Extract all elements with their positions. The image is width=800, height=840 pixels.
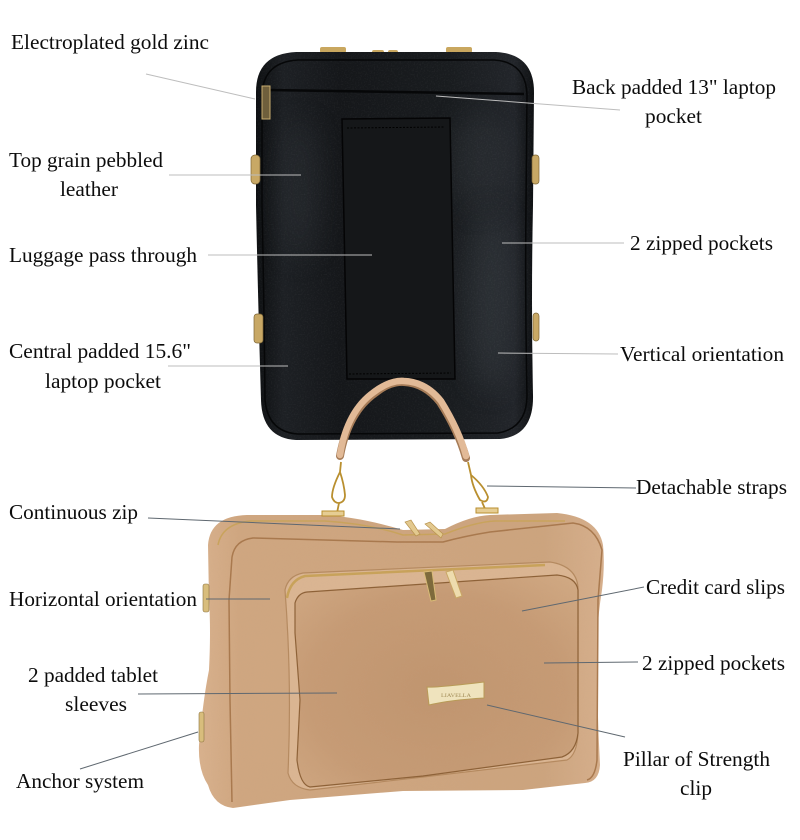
- label: Central padded laptop pocket: laptop pocket: [45, 369, 161, 393]
- label: Top grain pebbled leather: leather: [60, 177, 118, 201]
- label: Top grain pebbled leather: Top grain pebbled: [9, 148, 163, 172]
- label: Anchor system: Anchor system: [16, 769, 144, 793]
- outer zip seam: [262, 60, 527, 434]
- front pocket: [285, 562, 578, 790]
- left snap hook: [322, 462, 345, 516]
- right snap hook: [468, 462, 498, 513]
- detachable strap: [322, 381, 498, 516]
- pocket zip pulls: [424, 570, 462, 601]
- label: Horizontal orientation: Horizontal orientation: [9, 587, 198, 611]
- label: 2 padded tablet sleeves: 2 padded tablet: [28, 663, 158, 687]
- label: Electroplated gold zinc: Electroplated gold zinc: [11, 30, 209, 54]
- gold top hardware: [320, 47, 472, 54]
- label: Back padded 13 inch laptop pocket: [572, 75, 776, 128]
- continuous zip: [218, 521, 565, 545]
- label: 2 padded tablet sleeves: [28, 663, 158, 716]
- label: Continuous zip: Continuous zip: [9, 500, 138, 524]
- label: Back padded 13 inch laptop pocket: pocket: [645, 104, 702, 128]
- logo tab: [262, 86, 270, 119]
- front pocket panel: [295, 575, 578, 787]
- label: Pillar of Strength clip: [623, 747, 771, 800]
- anchor hardware: [199, 584, 209, 742]
- label: Vertical orientation: Vertical orientation: [620, 342, 784, 366]
- leather grain: [195, 512, 607, 810]
- label: Top grain pebbled leather: [9, 148, 163, 201]
- back pocket zip: [268, 90, 524, 94]
- label: 2 zipped pockets (front): 2 zipped pockets: [642, 651, 785, 675]
- luggage pass through strap: [342, 118, 455, 379]
- label: Back padded 13 inch laptop pocket: Back padded 13" laptop: [572, 75, 776, 99]
- bag body: [256, 52, 534, 440]
- front pocket zip: [287, 565, 545, 598]
- label: Central padded laptop pocket: [9, 339, 191, 393]
- side clips: [251, 155, 539, 343]
- label: Pillar of Strength clip: Pillar of Strength: [623, 747, 771, 771]
- label: Credit card slips: Credit card slips: [646, 575, 785, 599]
- inner main panel seam: [229, 523, 602, 802]
- callout lines: [80, 74, 644, 769]
- top zip pulls: [405, 520, 443, 538]
- label: 2 padded tablet sleeves: sleeves: [65, 692, 127, 716]
- tan bag: [195, 512, 607, 810]
- Pillar of Strength clip: [427, 682, 484, 705]
- label: Pillar of Strength clip: clip: [680, 776, 712, 800]
- bag body: [199, 513, 604, 808]
- label: 2 zipped pockets (back): 2 zipped pockets: [630, 231, 773, 255]
- label: Luggage pass through: Luggage pass through: [9, 243, 198, 267]
- highlights and grain: [250, 48, 540, 443]
- Pillar of Strength clip: LIAVELLA: [441, 694, 471, 699]
- black backpack: [250, 47, 540, 443]
- label: Detachable straps: Detachable straps: [636, 475, 787, 499]
- label: Central padded laptop pocket: Central padded 15.6": [9, 339, 191, 363]
